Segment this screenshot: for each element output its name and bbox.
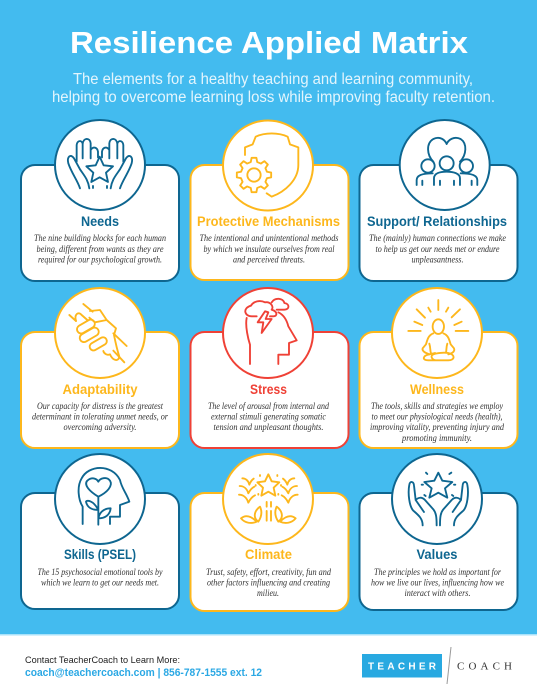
subtitle bbox=[52, 71, 495, 106]
description: determinant in tolerating unmet needs, or bbox=[32, 412, 168, 422]
subtitle: helping to overcome learning loss while improving faculty retention. bbox=[52, 89, 495, 106]
icon: group with heart bbox=[417, 138, 477, 185]
description: The level of arousal from internal and bbox=[208, 401, 329, 412]
logo: COACH bbox=[457, 660, 512, 672]
description: by which we insulate ourselves from real bbox=[204, 244, 335, 255]
panel: needs bbox=[21, 120, 179, 281]
heading: Wellness bbox=[410, 382, 464, 397]
heading: Skills (PSEL) bbox=[64, 547, 136, 562]
description: how we live our lives, influencing how we bbox=[371, 578, 504, 588]
icon: laurel and star bbox=[239, 474, 298, 523]
description: The principles we hold as important for bbox=[374, 567, 501, 578]
description: unpleasantness. bbox=[412, 256, 464, 266]
description: external stimuli generating somatic bbox=[211, 412, 327, 422]
description: Trust, safety, effort, creativity, fun and bbox=[206, 567, 331, 578]
description: being, different from wants as they are bbox=[36, 244, 164, 255]
heading: Adaptability bbox=[62, 382, 138, 397]
heading: Needs bbox=[81, 214, 119, 229]
description: milieu. bbox=[257, 589, 279, 599]
panel: stress bbox=[190, 288, 348, 448]
description bbox=[200, 234, 339, 266]
logo bbox=[362, 647, 512, 684]
description: and perceived threats. bbox=[233, 256, 305, 266]
contact label: Contact TeacherCoach to Learn More: bbox=[25, 655, 180, 666]
panel: wellness bbox=[360, 288, 518, 448]
description bbox=[38, 568, 163, 588]
title: Resilience Applied Matrix bbox=[70, 25, 469, 60]
panel: protective mechanisms bbox=[190, 120, 348, 280]
description: The intentional and unintentional methods bbox=[200, 234, 339, 244]
footer bbox=[0, 634, 537, 695]
heading: Stress bbox=[250, 382, 287, 397]
panel: climate bbox=[190, 454, 348, 611]
description: The (mainly) human connections we make bbox=[369, 233, 506, 244]
icon: meditating figure bbox=[408, 300, 468, 360]
panel: support relationships bbox=[360, 120, 518, 281]
icon: shield and gear bbox=[237, 133, 298, 197]
logo: TEACHER bbox=[368, 662, 437, 672]
contact details: coach@teachercoach.com | 856-787-1555 ext. 12 bbox=[25, 667, 262, 679]
description bbox=[369, 233, 506, 266]
description: interact with others. bbox=[404, 589, 470, 599]
heading: Support/ Relationships bbox=[367, 214, 507, 229]
subtitle: The elements for a healthy teaching and learning community, bbox=[73, 71, 473, 88]
description: The tools, skills and strategies we employ bbox=[371, 402, 504, 412]
description: promoting immunity. bbox=[401, 434, 472, 444]
icon: handshake bbox=[69, 304, 127, 362]
description: improving vitality, preventing injury and bbox=[370, 423, 504, 433]
description: The nine building blocks for each human bbox=[34, 233, 166, 244]
heading: Values bbox=[416, 547, 458, 562]
description bbox=[370, 402, 504, 444]
panel: skills bbox=[21, 454, 179, 609]
description: Our capacity for distress is the greatest bbox=[37, 401, 163, 412]
description: other factors influencing and creating bbox=[207, 578, 330, 588]
description bbox=[34, 233, 166, 266]
description bbox=[32, 401, 168, 433]
description: to meet our physiological needs (health), bbox=[372, 412, 502, 422]
description bbox=[208, 401, 329, 433]
description: tension and unpleasant thoughts. bbox=[214, 423, 324, 433]
icon: hands raising star bbox=[409, 473, 468, 525]
description bbox=[371, 567, 504, 599]
description bbox=[206, 567, 331, 599]
description: The 15 psychosocial emotional tools by bbox=[38, 568, 163, 578]
heading: Climate bbox=[245, 547, 292, 562]
description: which we learn to get our needs met. bbox=[41, 578, 159, 588]
description: overcoming adversity. bbox=[64, 423, 136, 433]
panel: values bbox=[360, 454, 518, 610]
icon: hands holding star bbox=[68, 139, 132, 188]
heading: Protective Mechanisms bbox=[197, 214, 340, 229]
description: required for our psychological growth. bbox=[38, 254, 162, 266]
icon: head with storm cloud bbox=[245, 299, 297, 364]
panel: adaptability bbox=[21, 288, 179, 448]
icon: head with heart flower bbox=[79, 468, 129, 525]
description: to help us get our needs met or endure bbox=[376, 245, 500, 255]
